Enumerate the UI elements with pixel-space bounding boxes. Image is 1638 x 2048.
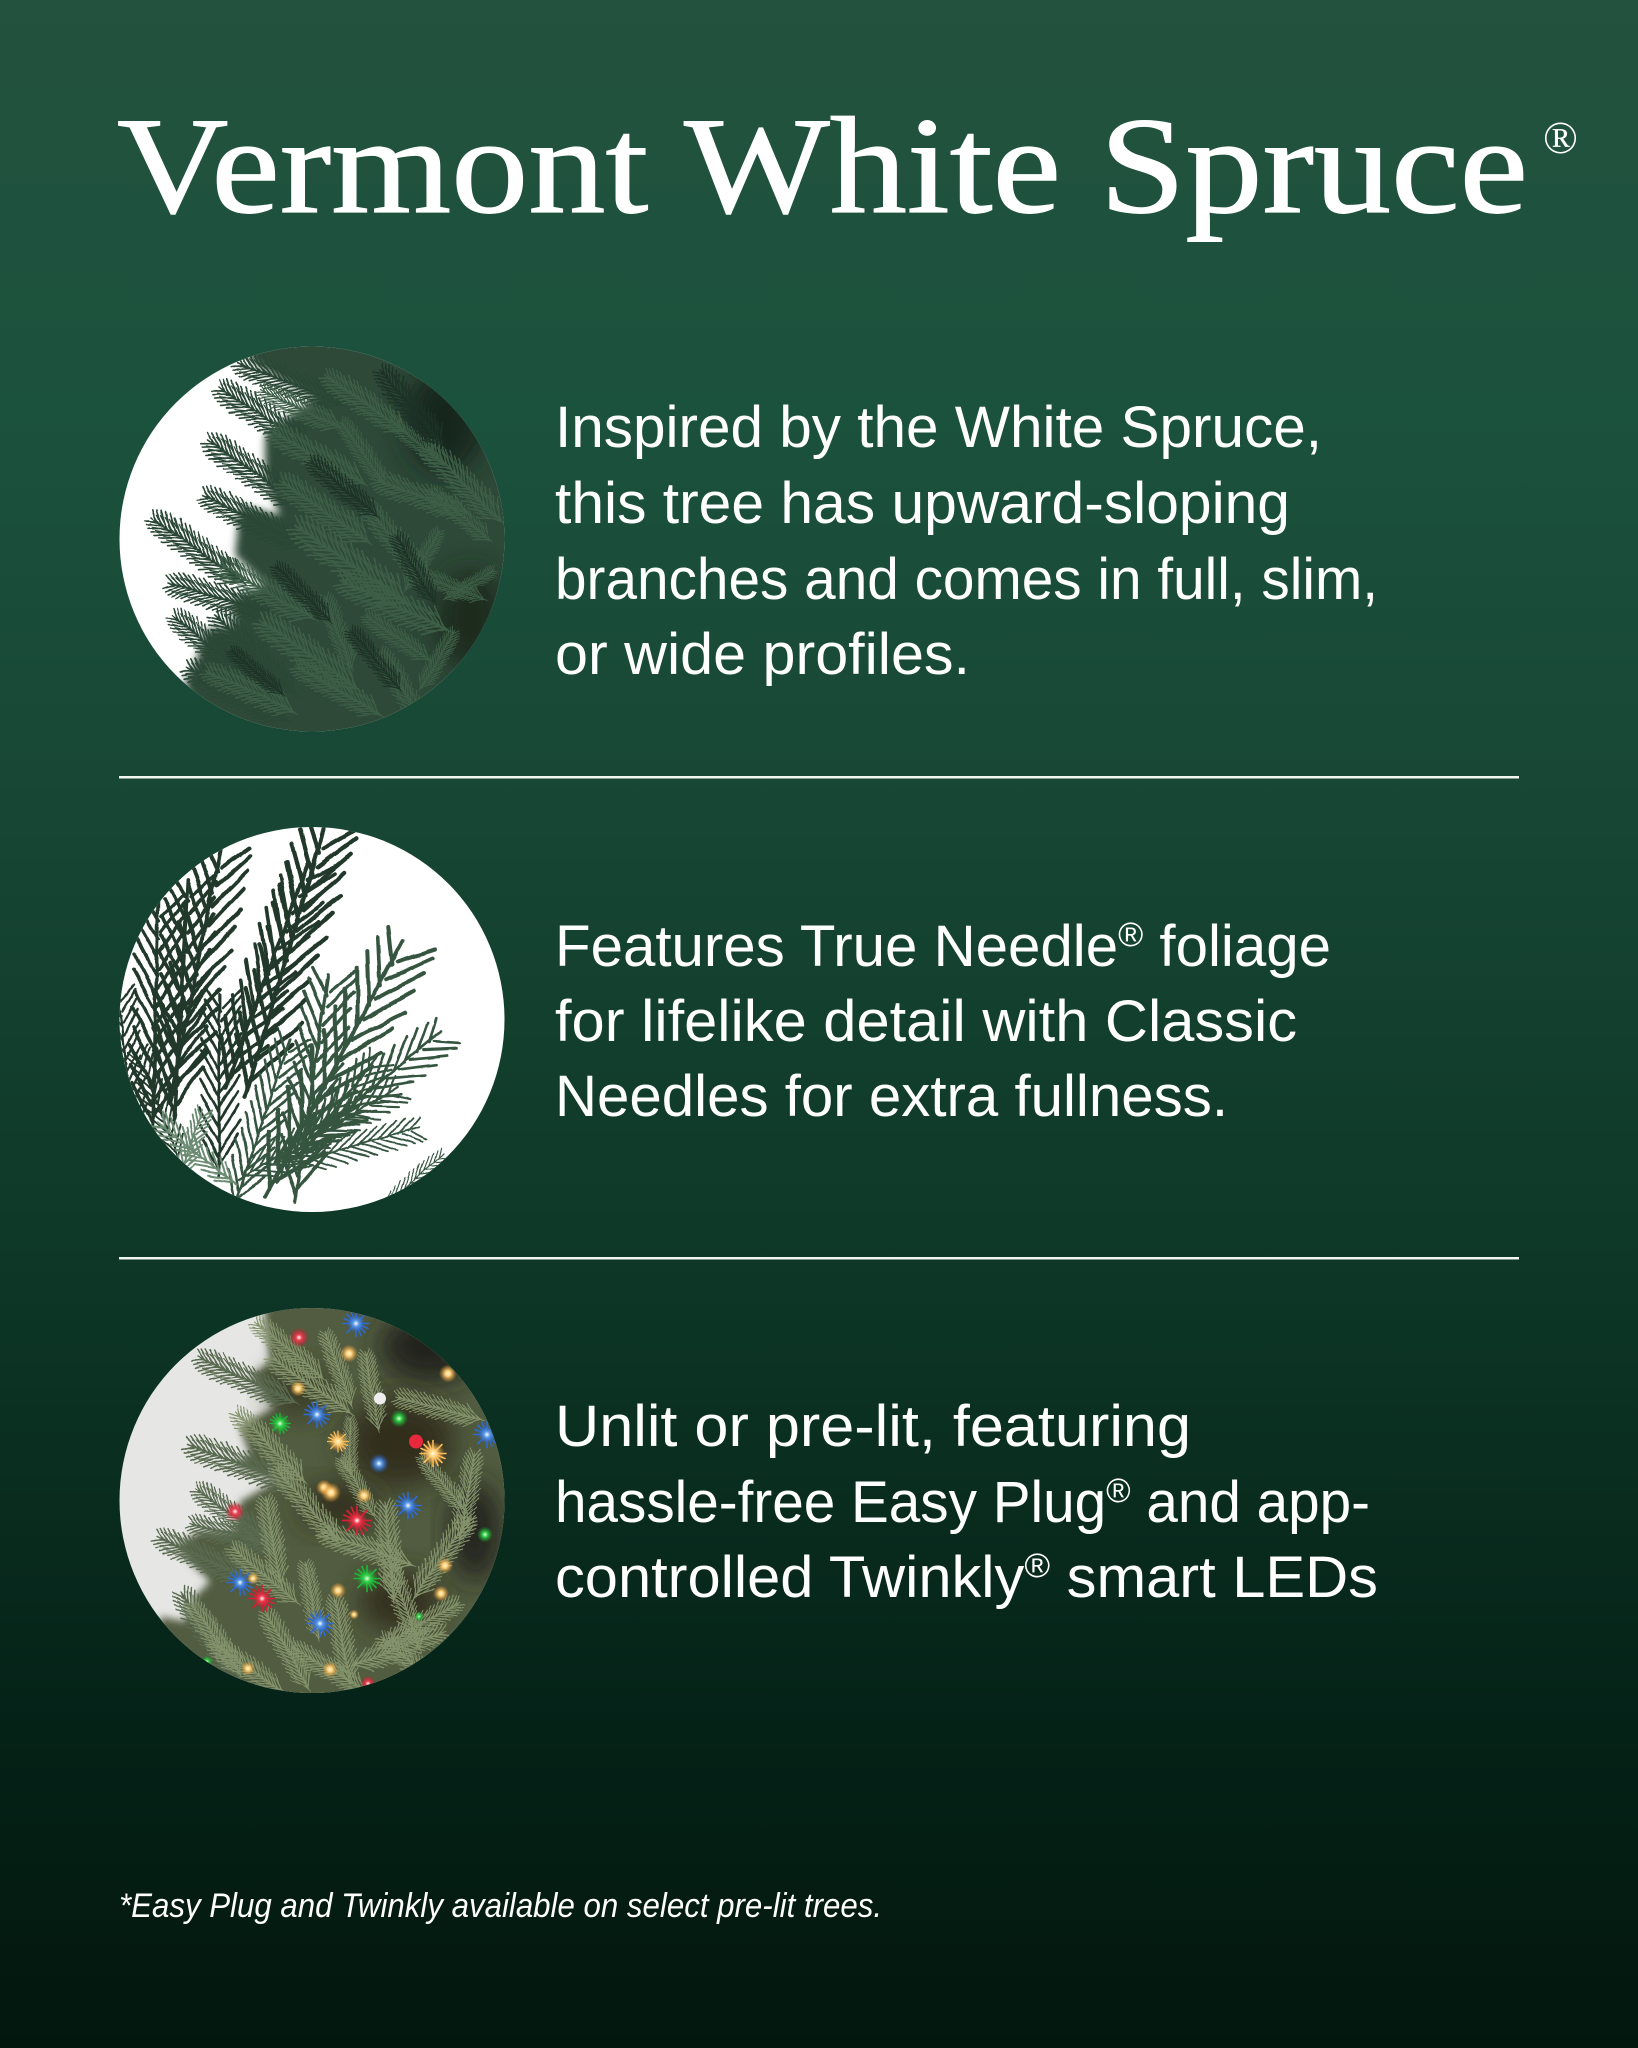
description text: lighting options: and app- — [1131, 1470, 1370, 1535]
description text: lighting options: smart LEDs — [1050, 1545, 1378, 1610]
description text: true needle foliage: Features True Needle — [555, 914, 1116, 979]
description text: branches and profiles: Inspired by the White Spruce, — [555, 395, 1322, 460]
description text: branches and profiles — [555, 395, 1378, 687]
photo: true needle foliage — [104, 812, 505, 1216]
description text: true needle foliage: Needles for extra fullness. — [555, 1064, 1228, 1129]
description text: true needle foliage — [555, 914, 1331, 1129]
description text: branches and profiles: branches and comes in full, slim, — [555, 547, 1378, 612]
title: Vermont White Spruce — [117, 89, 1528, 242]
string lights — [201, 1310, 500, 1692]
description text: lighting options: hassle-free Easy Plug — [555, 1470, 1119, 1535]
description text: branches and profiles: or wide profiles. — [555, 622, 970, 687]
description text: branches and profiles: this tree has upward-sloping — [555, 471, 1290, 536]
photo: pre-lit tree with multicolor lights — [120, 1308, 504, 1693]
description text: true needle foliage: foliage — [1143, 914, 1331, 979]
photo: spruce branches — [120, 346, 504, 732]
description text: lighting options: Unlit or pre-lit, featuring — [555, 1394, 1191, 1459]
description text: lighting options — [555, 1394, 1378, 1610]
description text: true needle foliage: for lifelike detail with Classic — [555, 989, 1297, 1054]
footnote: *Easy Plug and Twinkly available on select pre-lit trees. — [119, 1887, 882, 1925]
description text: lighting options: controlled Twinkly — [555, 1545, 1012, 1610]
description text: true needle foliage: ® — [1118, 916, 1143, 954]
title: ® — [1543, 112, 1578, 163]
description text: lighting options: ® — [1024, 1547, 1050, 1585]
description text: lighting options: ® — [1106, 1472, 1131, 1510]
